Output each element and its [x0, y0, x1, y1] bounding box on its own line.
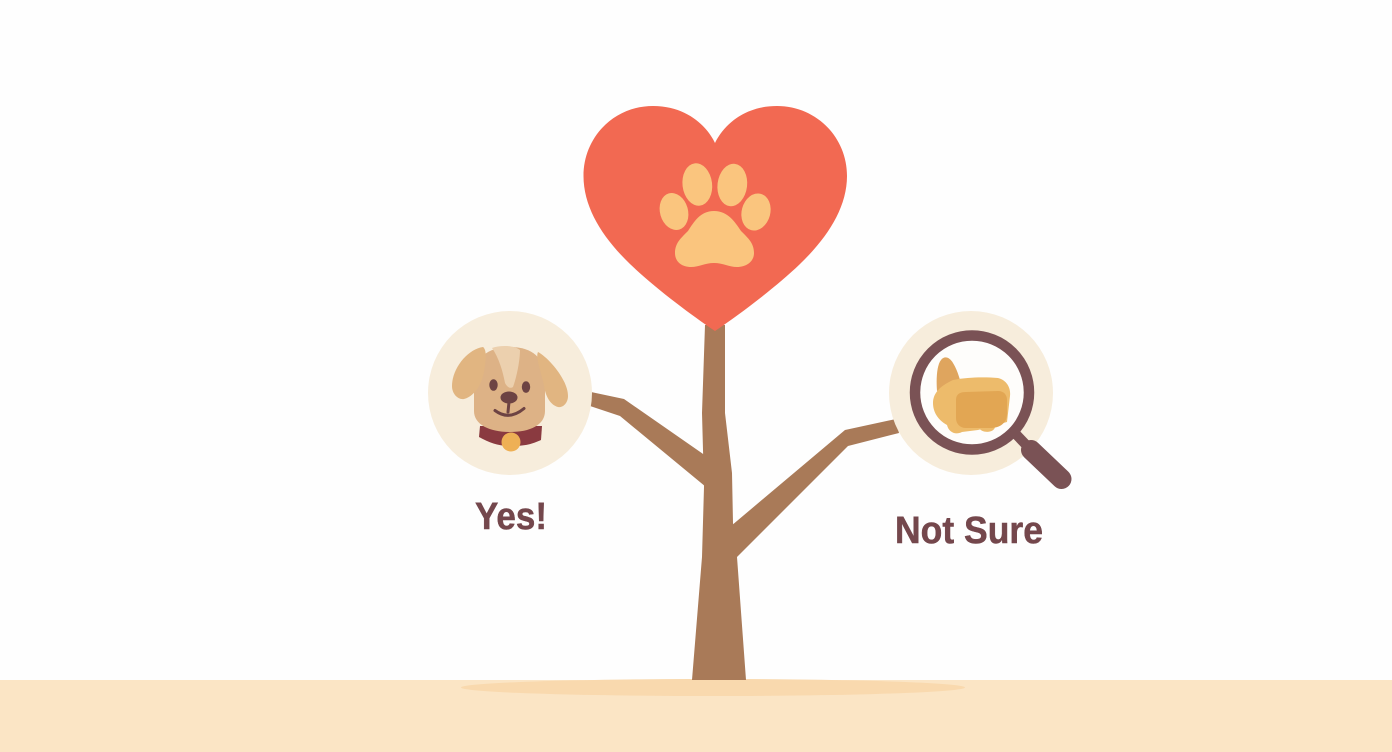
badge circle [889, 311, 1053, 475]
right branch [731, 419, 899, 560]
icon: mystery dog [933, 357, 1010, 433]
magnifier ring and handle [915, 336, 1062, 479]
icon: dog face [452, 346, 568, 452]
heart with paw print [584, 106, 847, 331]
heart [584, 106, 847, 331]
magnifier lens [920, 340, 1024, 444]
badge circle [428, 311, 592, 475]
yes badge: happy dog [428, 311, 592, 475]
paw print [655, 162, 775, 267]
label: Yes!: Yes! [475, 496, 547, 538]
ground [0, 679, 1392, 752]
label: Not Sure: Not Sure [895, 510, 1043, 552]
tree trunk and branches [590, 325, 899, 680]
left branch [590, 392, 706, 487]
not sure badge: magnifier [889, 311, 1062, 479]
